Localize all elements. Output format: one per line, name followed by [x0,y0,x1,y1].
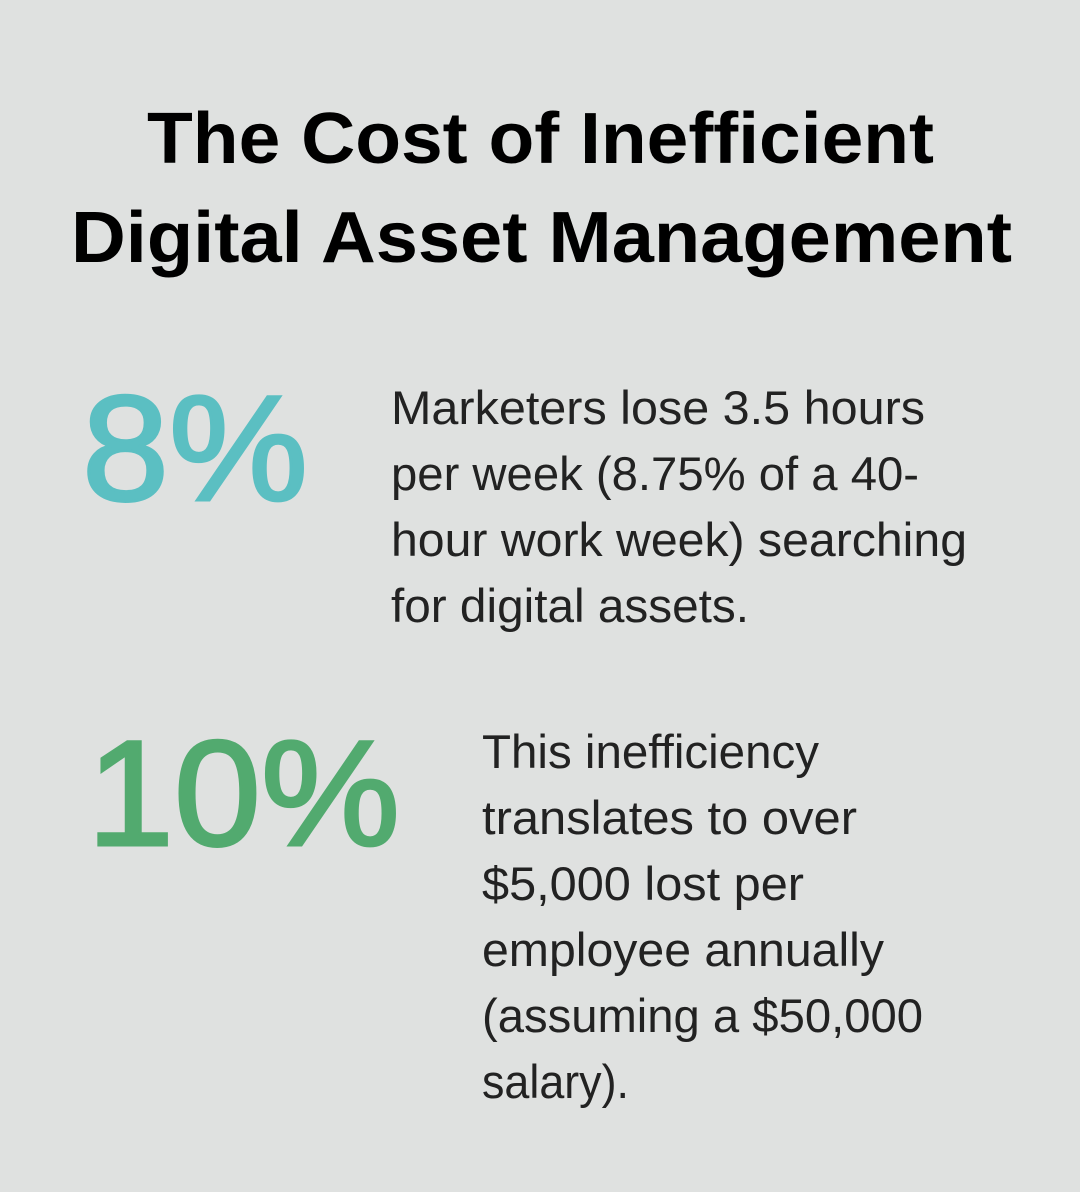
description: 10% statistic: This inefficiency [482,725,820,778]
description: 10% statistic [482,725,923,1108]
description: 8% statistic: Marketers lose 3.5 hours [391,381,925,434]
description: 10% statistic: translates to over [482,791,857,844]
description: 8% statistic [391,381,967,632]
description: 10% statistic: $5,000 lost per [482,857,804,910]
title: Digital Asset Management [71,198,1012,278]
title [71,99,1012,278]
description: 10% statistic: salary). [482,1055,629,1108]
description: 10% statistic: employee annually [482,923,885,976]
description: 10% statistic: (assuming a $50,000 [482,989,923,1042]
title: The Cost of Inefficient [147,99,934,179]
description: 8% statistic: per week (8.75% of a 40- [391,447,919,500]
statistic: 8%: 8% [82,364,308,532]
description: 8% statistic: for digital assets. [391,579,749,632]
description: 8% statistic: hour work week) searching [391,513,967,566]
statistic: 10%: 10% [87,709,400,877]
